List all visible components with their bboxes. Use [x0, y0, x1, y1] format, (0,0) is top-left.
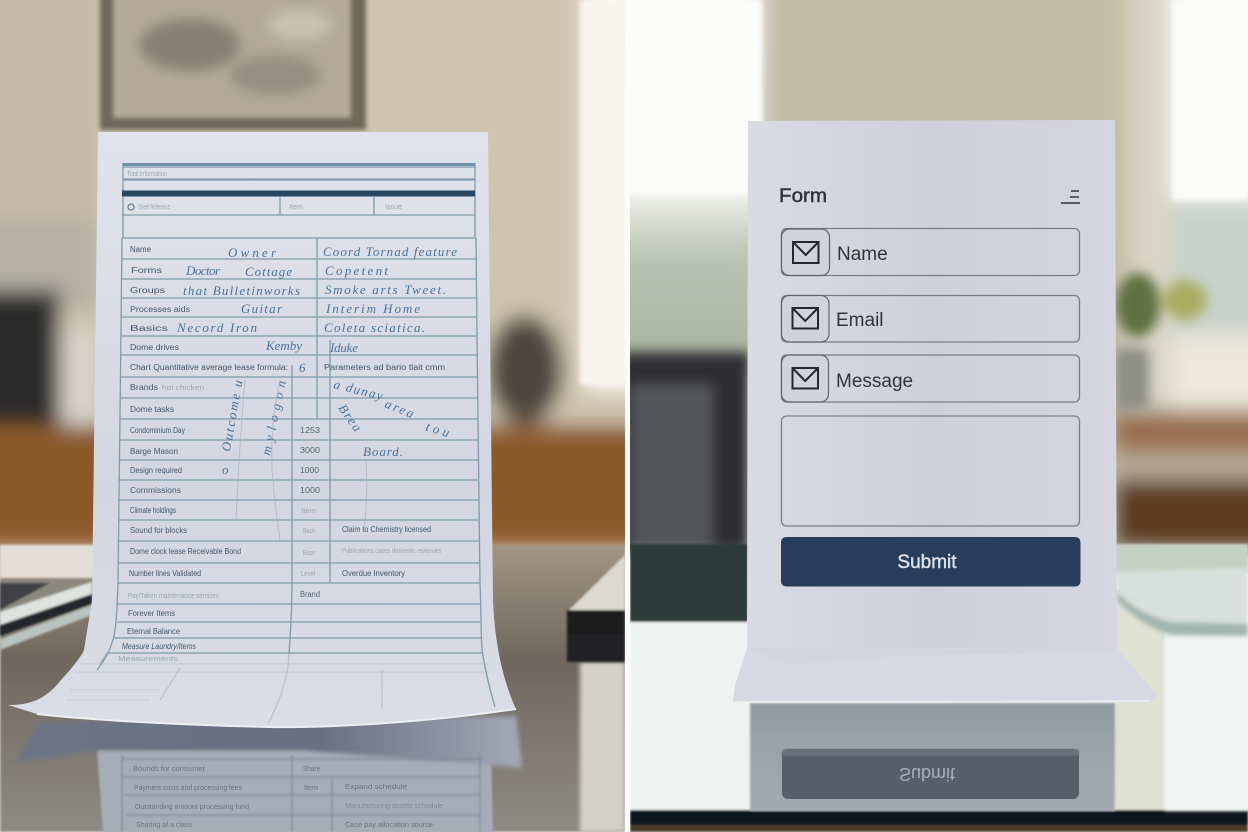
printed field labels: Dome clock lease Receivable Bond: [130, 547, 241, 556]
handwritten entries: o: [222, 462, 229, 477]
printed field labels: Design required: [130, 466, 182, 475]
handwritten entries: Copetent: [325, 263, 388, 278]
printed field labels: Parameters ad bario tlait cmm: [324, 363, 445, 372]
reflection of paper in table: Expand schedule: [345, 782, 407, 791]
device on the right of the table: [567, 555, 625, 662]
panel: digital form photo: [600, 0, 1248, 832]
message text area: [782, 416, 1080, 526]
reflection of paper in table: Case pay allocation source: [345, 820, 433, 829]
handwritten entries: Owner: [228, 245, 277, 260]
reflection of paper in table: Payment costs and processing fees: [134, 783, 242, 792]
handwritten entries: [176, 244, 457, 540]
handwritten entries: area: [383, 396, 417, 421]
printed field labels: Brand: [300, 590, 320, 599]
glass table surface: [630, 544, 1248, 832]
handwritten entries: that Bulletinworks: [183, 283, 300, 298]
printed field labels: Forms: [131, 266, 162, 275]
handwritten entries: Cottage: [245, 264, 292, 279]
blurred window and wall background: [600, 0, 1248, 570]
reflection of paper in table: Share: [303, 764, 320, 773]
form header bars: Total Information: [127, 169, 167, 178]
printed field labels: Eternal Balance: [127, 627, 181, 636]
field: email: Email: [836, 310, 884, 331]
printed field labels: 1000: [300, 486, 321, 495]
handwritten entries: Coleta sciatica.: [324, 320, 425, 335]
handwritten entries: Kemby: [265, 338, 302, 353]
handwritten entries: 6: [299, 360, 306, 375]
handwritten entries: Necord Iron: [176, 320, 257, 335]
printed field labels: Base: [303, 548, 315, 557]
printed field labels: Brands: [130, 383, 158, 392]
field: name: Name: [837, 244, 888, 265]
submit button: [781, 537, 1080, 586]
framed picture on the wall: [100, 0, 366, 130]
laptop at left edge: [0, 545, 95, 650]
form header bars: Item: [289, 202, 303, 211]
form header bars: Issue: [385, 202, 402, 211]
handwritten entries: tou: [424, 419, 452, 440]
glass table top: [0, 545, 625, 832]
printed field labels: [118, 245, 445, 663]
field: email: [782, 296, 1080, 342]
printed field labels: Basics: [130, 324, 168, 333]
handwritten entries: Board.: [363, 444, 403, 459]
handwritten entries: Guitar: [241, 301, 283, 316]
handwritten entries: Brea: [336, 401, 365, 435]
handwritten entries: mylogon: [258, 379, 289, 457]
reflection of paper in table: Sharing of a class: [136, 820, 192, 829]
printed field labels: Measurements: [118, 654, 178, 663]
handwritten entries: Smoke arts Tweet.: [325, 282, 446, 297]
form title: Form: [779, 186, 827, 207]
chair: [620, 352, 750, 552]
printed field labels: Forever Items: [128, 609, 175, 618]
handwritten entries: Iduke: [329, 340, 358, 355]
printed field labels: Climate holdings: [130, 506, 176, 515]
form header bars: Sheet Reference: [138, 202, 170, 211]
printed field labels: Barge Mason: [130, 447, 178, 456]
reflection of paper in table: Bounds for consumer: [133, 764, 205, 773]
printed field labels: Level: [301, 569, 315, 578]
reflection of paper in table: Manufacturing assets schedule: [345, 801, 443, 810]
field: message: Message: [836, 371, 913, 392]
form card: [733, 120, 1158, 703]
submit button: Submit: [897, 552, 957, 573]
printed field labels: hot chicken: [162, 383, 204, 392]
paper form sheet: [8, 132, 516, 727]
form table grid: [66, 163, 495, 724]
handwritten entries: Doctor: [185, 263, 221, 278]
handwritten entries: Coord Tornad feature: [323, 244, 457, 259]
loose paper on the right: [1115, 568, 1248, 810]
printed field labels: 1253: [300, 426, 321, 435]
reflection of paper in table: [15, 716, 522, 832]
printed field labels: Sound for blocks: [130, 526, 187, 535]
printed field labels: Name: [130, 245, 152, 254]
plant and pot: [1115, 273, 1207, 410]
field: message: [782, 355, 1080, 402]
printed field labels: Overdue Inventory: [342, 569, 405, 578]
printed field labels: Dome drives: [130, 343, 179, 352]
field: name: [782, 228, 1080, 276]
printed field labels: 1000: [300, 466, 320, 475]
printed field labels: Publications cases domestic revenues: [342, 546, 441, 555]
blurred office background: [0, 0, 670, 550]
printed field labels: Measure Laundry/Items: [122, 642, 196, 651]
printed field labels: Condominium Day: [130, 426, 185, 435]
reflection of paper in table: Item: [304, 783, 318, 792]
printed field labels: Item: [301, 506, 316, 515]
form header bars: [122, 163, 475, 211]
printed field labels: Back: [303, 526, 315, 535]
printed field labels: Claim to Chemistry licensed: [342, 525, 431, 534]
handwritten entries: Interim Home: [325, 301, 420, 316]
handwritten entries: a dunay: [332, 376, 385, 403]
printed field labels: 3000: [300, 446, 321, 455]
printed field labels: Processes aids: [130, 305, 190, 314]
icon: menu: [1061, 191, 1080, 203]
bottom fold of card: [733, 648, 1158, 703]
reflection of form in table: Submit: [899, 764, 955, 784]
printed field labels: Number lines Validated: [129, 569, 201, 578]
icon: envelope: [792, 308, 818, 328]
printed field labels: Groups: [130, 286, 165, 295]
icon: envelope: [793, 242, 818, 263]
divider between photos: [625, 0, 630, 832]
printed field labels: Dome tasks: [130, 405, 174, 414]
reflection of paper in table: Outstanding amount processing fund: [135, 802, 249, 811]
reflection of form in table: [750, 703, 1115, 811]
printed field labels: Chart Quantitative average lease formula:: [130, 363, 288, 372]
icon: envelope: [792, 368, 818, 388]
printed field labels: Pay/Taken maintenance services: [128, 591, 219, 600]
printed field labels: Commissions: [130, 486, 181, 495]
handwritten entries: Outcome u: [218, 379, 246, 453]
panel: paper form photo: [0, 0, 670, 832]
